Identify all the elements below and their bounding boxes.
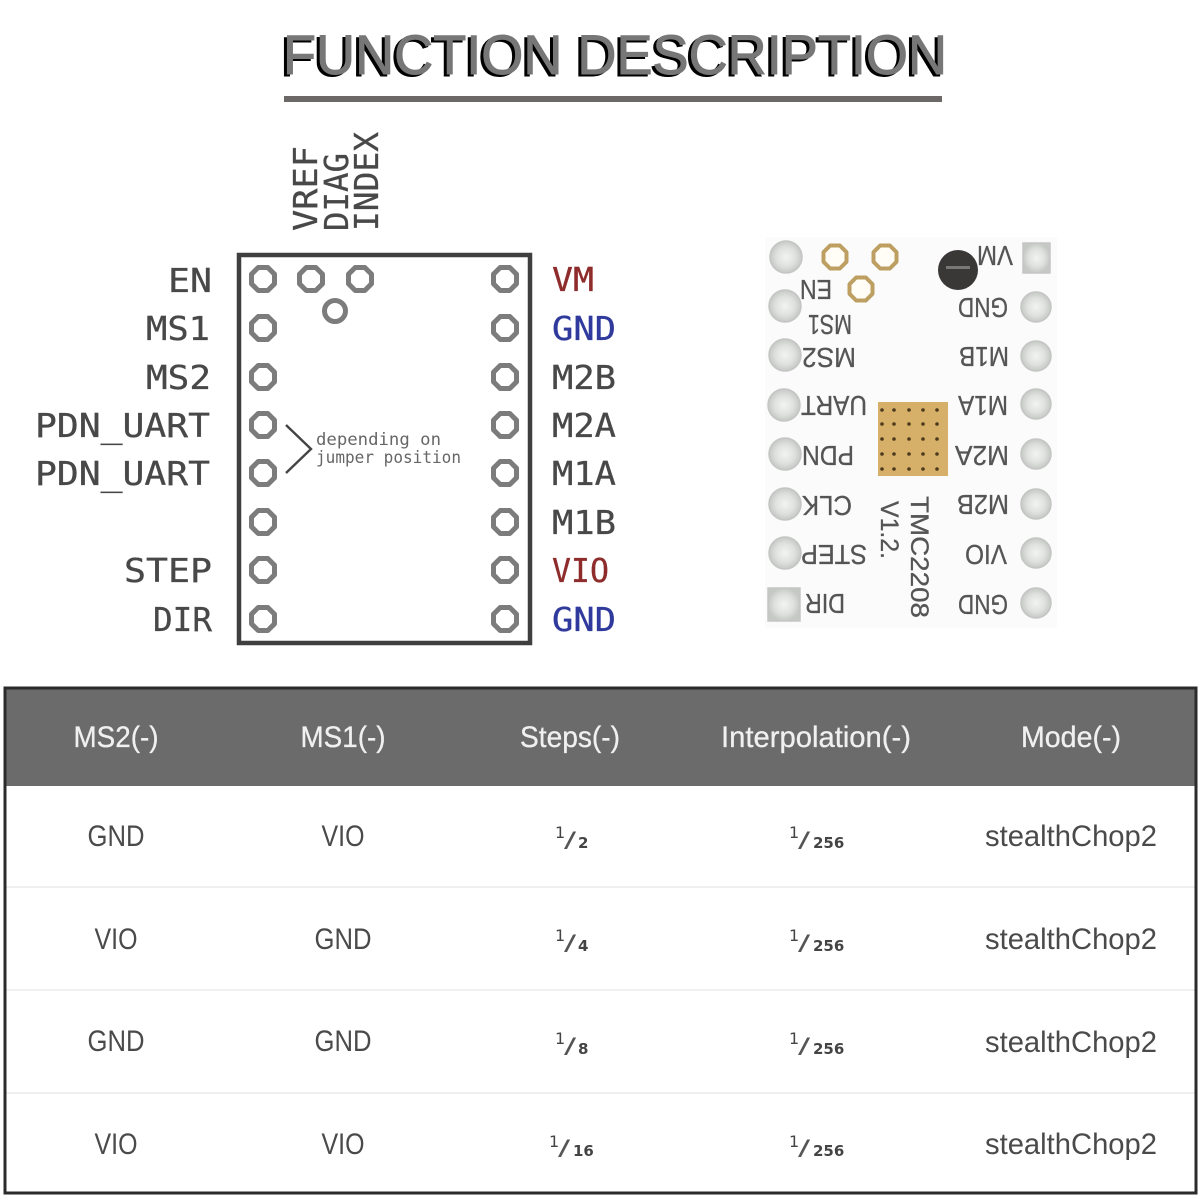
top pin labels: DIAG (317, 153, 356, 231)
left pin labels: MS1 (146, 309, 210, 348)
row 4: 256 (813, 1142, 844, 1160)
table header: Steps(-) (520, 721, 620, 754)
jumper bracket and note: jumper position (316, 448, 461, 468)
row 3 (88, 1025, 1157, 1059)
board silkscreen labels: GND (958, 589, 1008, 620)
table header (6, 689, 1195, 786)
left pin labels: EN (168, 261, 212, 300)
row 4: 1 (549, 1132, 559, 1151)
row 3: 1 (555, 1029, 565, 1048)
row 3: GND (314, 1025, 372, 1058)
board pads (768, 241, 1051, 621)
row 2: / (564, 930, 576, 955)
row 4: VIO (94, 1128, 138, 1161)
row 4: / (798, 1135, 810, 1160)
row 3: GND (88, 1025, 144, 1058)
row 1: 256 (813, 834, 844, 852)
left pin labels (35, 261, 212, 639)
row 4: / (558, 1135, 570, 1160)
board silkscreen labels: M1A (958, 390, 1008, 421)
table header: MS2(-) (74, 721, 158, 754)
row 3: / (564, 1033, 576, 1058)
row 2: 4 (578, 937, 588, 955)
module outline (239, 255, 530, 643)
title: FUNCTION DESCRIPTION (280, 25, 944, 88)
row 4: VIO (322, 1128, 364, 1161)
row 2: 256 (813, 937, 844, 955)
row 2: VIO (94, 923, 138, 956)
title underline (284, 96, 942, 102)
title: FUNCTION DESCRIPTION (283, 23, 947, 86)
row 1 (88, 820, 1157, 853)
panel: board photo (765, 237, 1057, 628)
board silkscreen labels (800, 240, 1013, 620)
row 1: GND (88, 820, 144, 853)
board silkscreen labels: EN (800, 274, 832, 305)
row 4: 16 (573, 1142, 594, 1160)
row 2: 1 (555, 926, 565, 945)
right pin labels: M2A (552, 406, 616, 445)
board silkscreen labels: VM (977, 240, 1013, 271)
row 2: / (798, 930, 810, 955)
row 3: / (798, 1033, 810, 1058)
right pin labels: VM (552, 260, 594, 299)
row 2: 1 (789, 926, 799, 945)
table header: MS1(-) (300, 721, 386, 754)
board (765, 237, 1057, 628)
board silkscreen labels: GND (958, 292, 1008, 323)
board silkscreen labels: DIR (805, 588, 845, 619)
row 2 (94, 923, 1157, 956)
row 3: 1 (789, 1029, 799, 1048)
row 1: / (798, 827, 810, 852)
capacitor (938, 250, 978, 290)
top pin labels: VREF (286, 146, 325, 231)
board silkscreen labels: STEP (801, 539, 867, 570)
row 4 (94, 1128, 1157, 1161)
left pin labels: PDN_UART (35, 454, 210, 494)
board silkscreen labels: M2A (955, 440, 1009, 471)
top pin labels: INDEX (347, 132, 386, 231)
panel: microstep table (5, 688, 1196, 1193)
row 3: stealthChop2 (985, 1026, 1157, 1059)
row 1: / (564, 827, 576, 852)
row 2: GND (314, 923, 372, 956)
board silkscreen labels: MS2 (802, 342, 856, 373)
row 3: 256 (813, 1040, 844, 1058)
table header: Interpolation(-) (721, 721, 911, 754)
jumper bracket and note: depending on (316, 430, 441, 450)
board silkscreen labels: TMC2208 (905, 496, 933, 618)
board silkscreen labels: V1.2. (875, 501, 903, 559)
board silkscreen labels: UART (801, 390, 867, 421)
row 2: stealthChop2 (985, 923, 1157, 956)
right pin labels: M1A (552, 454, 616, 493)
left pin labels: STEP (124, 551, 212, 590)
board silkscreen labels: CLK (802, 490, 852, 521)
board silkscreen labels: PDN (802, 440, 854, 471)
board silkscreen labels: M1B (959, 341, 1009, 372)
left pin labels: DIR (153, 600, 212, 639)
board silkscreen labels: MS1 (808, 309, 852, 340)
row 1: 1 (789, 823, 799, 842)
right pin labels: M2B (552, 358, 616, 397)
board silkscreen labels: M2B (957, 489, 1009, 520)
pin holes (252, 268, 516, 630)
right pin labels: GND (552, 600, 616, 639)
row 1: 1 (555, 823, 565, 842)
panel: pinout diagram (35, 132, 616, 643)
row 3: 8 (578, 1040, 588, 1058)
top pin labels (286, 132, 386, 231)
right pin labels: GND (552, 309, 616, 348)
board silkscreen labels: VIO (965, 539, 1007, 570)
gold vias (824, 246, 896, 300)
jumper bracket and note (286, 425, 461, 473)
row 4: stealthChop2 (985, 1128, 1157, 1161)
left pin labels: MS2 (146, 358, 211, 397)
right pin labels (552, 260, 616, 639)
right pin labels: VIO (552, 551, 609, 590)
row 4: 1 (789, 1132, 799, 1151)
right pin labels: M1B (552, 503, 616, 542)
row 1: VIO (322, 820, 364, 853)
table header: Mode(-) (1021, 721, 1121, 754)
row 1: 2 (578, 834, 588, 852)
row 1: stealthChop2 (985, 820, 1157, 853)
left pin labels: PDN_UART (35, 406, 210, 446)
thermal pad (878, 402, 948, 476)
